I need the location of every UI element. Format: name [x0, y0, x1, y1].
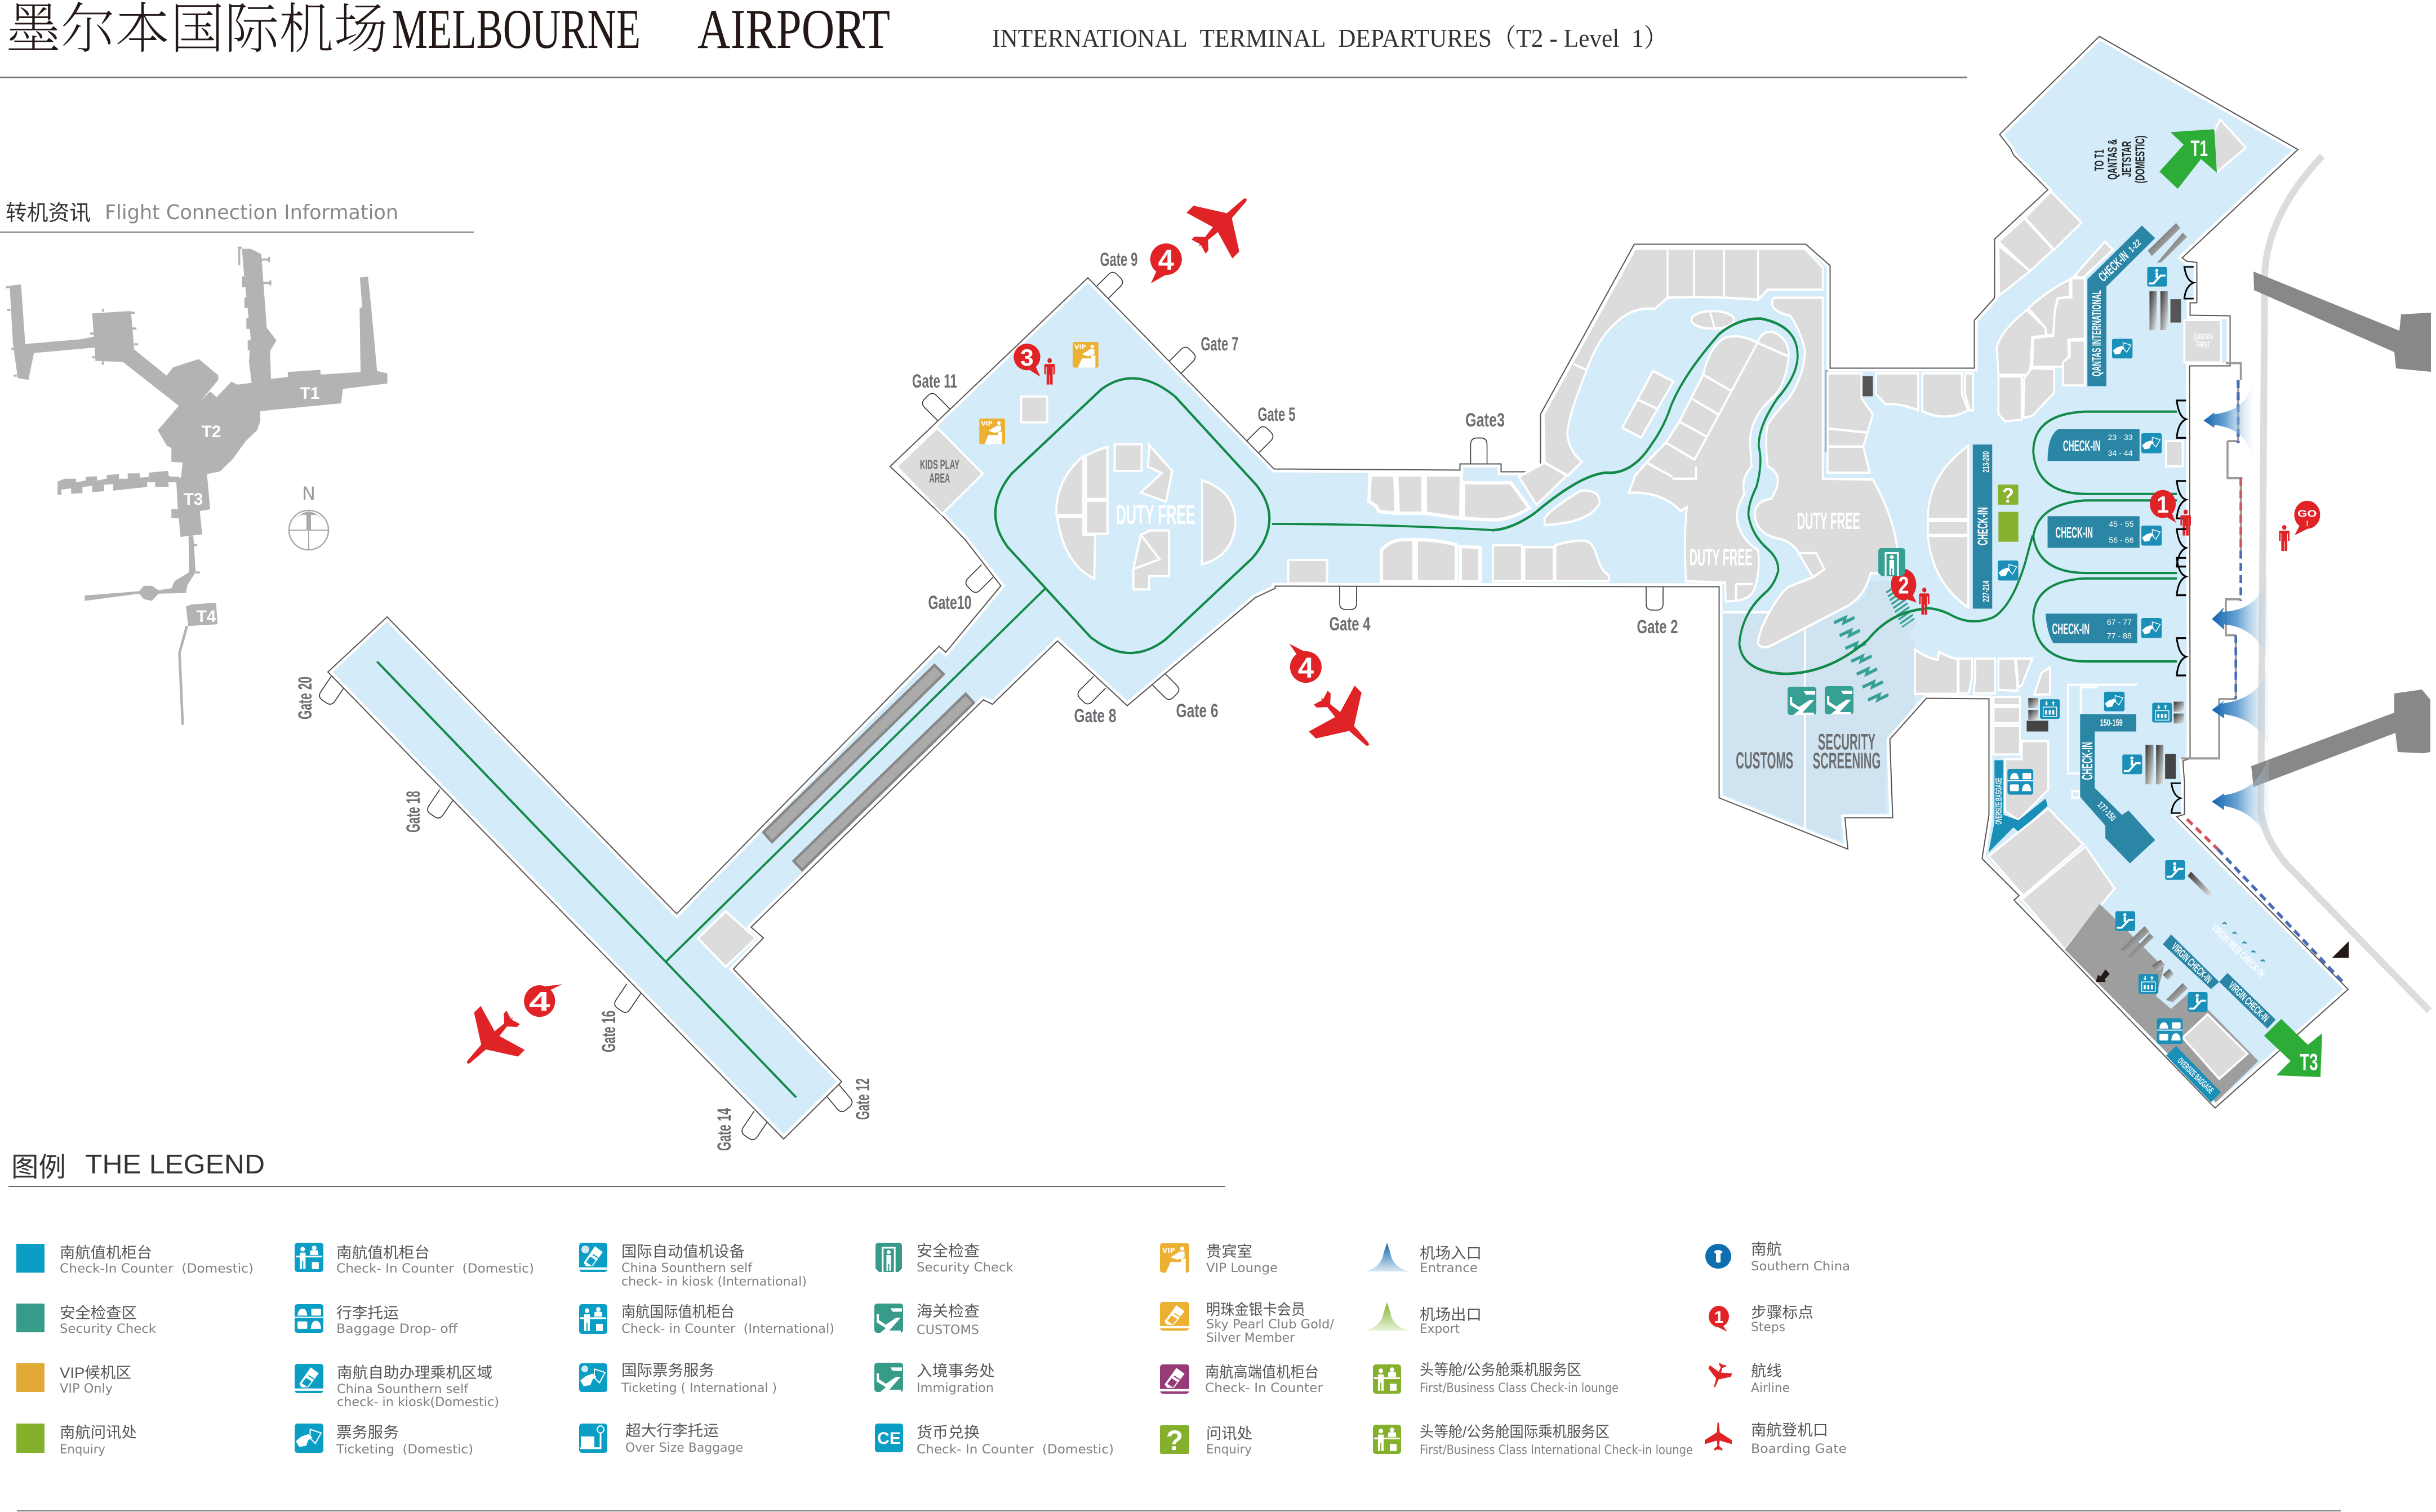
legend: airline: Airline [1751, 1381, 1790, 1395]
qantas first [2184, 320, 2221, 362]
legend: enquiry zone [16, 1424, 137, 1457]
legend: oversize baggage [579, 1422, 743, 1455]
legend: first business lounge [1373, 1362, 1619, 1395]
gate labels: Gate 5 [1257, 404, 1296, 425]
entrance arrow [2212, 574, 2269, 668]
check-in bar 200-227: 227-214 [1981, 581, 1991, 602]
legend: ticketing domestic [295, 1424, 473, 1457]
arrow to T1 [2159, 119, 2246, 189]
duty free retail left [1629, 332, 1789, 602]
step 4 marker: 4 [1298, 652, 1314, 684]
legend: entrance: 机场入口 [1420, 1245, 1482, 1262]
pier shapes and route [377, 661, 973, 1097]
legend: ticketing domestic: Ticketing (Domestic) [336, 1443, 473, 1457]
title: 墨尔本国际机场 [6, 0, 388, 60]
legend: first business international lounge [1373, 1424, 1693, 1457]
icon: ticketing [2112, 339, 2132, 358]
route: main path through retail [1493, 319, 1926, 674]
hub: satellite concourse [896, 243, 1327, 684]
virgin web check-in [2209, 921, 2267, 980]
entry doors [2171, 529, 2186, 813]
kids play area [896, 428, 983, 514]
transit zone [2065, 904, 2259, 1102]
person [2180, 510, 2191, 536]
check-in 67-88: 77 - 88 [2107, 632, 2132, 640]
north check-in hall [1997, 119, 2320, 601]
check-in 67-88: 67 - 77 [2107, 618, 2132, 626]
entry doors [2177, 267, 2194, 595]
check-in 23-44 [2048, 429, 2140, 461]
legend: first business lounge: First/Business Class Check-in lounge [1420, 1381, 1619, 1395]
legend: premium check-in [1160, 1364, 1323, 1395]
south check-in hall [1926, 529, 2349, 1102]
legend: security check zone: 安全检查区 [60, 1305, 137, 1322]
label: to T1: (DOMESTIC) [2133, 136, 2148, 183]
legend: self check-in domestic: China Sounthern self [337, 1382, 469, 1397]
south retail [1989, 808, 2083, 896]
qantas first: FIRST [2197, 340, 2211, 349]
escalators and lifts [2145, 702, 2212, 897]
route: pier connector [666, 589, 1045, 961]
legend: enquiry [1160, 1425, 1252, 1457]
icon: ticketing [2141, 526, 2162, 546]
icon: customs [1788, 687, 1816, 715]
legend: first business international lounge: First/Business Class International Check-in lounge [1420, 1443, 1693, 1457]
legend: oversize baggage: 超大行李托运 [625, 1422, 719, 1439]
legend: steps [1709, 1304, 1813, 1335]
kids play area: AREA [929, 470, 950, 485]
legend: check-in counter: Check- In Counter (Domestic) [336, 1262, 534, 1276]
kerb line north [2226, 363, 2242, 601]
oversize baggage bar [2166, 1046, 2221, 1102]
legend: check-in counter domestic: Check-In Counter (Domestic) [60, 1262, 254, 1276]
legend: vip lounge: VIP [1162, 1247, 1175, 1255]
icon: vip lounge [979, 419, 1005, 444]
virgin web check-in: VIRGIN WEB CHECK-IN [2209, 921, 2267, 980]
gate labels: Gate 20 [295, 677, 316, 719]
terminal labels: T3 [183, 490, 203, 509]
legend: immigration: 入境事务处 [917, 1363, 995, 1380]
stairs [1862, 376, 1873, 396]
entrance arrow [2212, 754, 2269, 847]
gate labels: Gate 11 [912, 371, 957, 392]
icon: ticketing [1998, 561, 2019, 581]
duty free retail right [1755, 298, 1898, 647]
kerb line south [2181, 599, 2344, 983]
legend: baggage drop-off: Baggage Drop- off [336, 1322, 458, 1336]
legend: currency exchange [875, 1424, 1114, 1457]
legend: vip lounge: VIP Lounge [1206, 1261, 1278, 1275]
icon: escalator [2115, 911, 2135, 931]
legend: steps: 步骤标点 [1751, 1304, 1813, 1321]
legend: enquiry: ? [1166, 1425, 1183, 1456]
icon: lift [2152, 702, 2172, 723]
legend: enquiry: Enquiry [1206, 1443, 1252, 1457]
legend: self check-in domestic [295, 1364, 499, 1409]
check-in 23-44: CHECK-IN [2063, 438, 2101, 454]
compass: N [302, 483, 315, 504]
legend: oversize baggage: Over Size Baggage [625, 1441, 743, 1455]
step 4 marker: pier [524, 984, 562, 1017]
legend: first business international lounge: 头等舱/公务舱国际乘机服务区 [1420, 1424, 1610, 1440]
icon: ticketing [2141, 618, 2162, 638]
legend: currency exchange: Check- In Counter (Domestic) [917, 1443, 1114, 1457]
heading: flight connection information: 转机资讯 [6, 202, 91, 225]
check-in 45-66 [2048, 516, 2140, 548]
step 4 marker [1150, 243, 1182, 283]
kids play area: KIDS PLAY [920, 457, 959, 472]
planes [446, 176, 1392, 1085]
legend: sky pearl club [1160, 1301, 1335, 1345]
check-in: qantas international: QANTAS INTERNATIONAL [2090, 290, 2104, 376]
legend: boarding gate: 南航登机口 [1751, 1422, 1828, 1439]
gate labels: Gate10 [928, 592, 971, 613]
step 3 marker [1013, 344, 1041, 377]
aerobridge upper [2253, 272, 2431, 372]
virgin check-in [2219, 973, 2275, 1029]
legend: enquiry zone: 南航问讯处 [60, 1424, 137, 1441]
route: loop around duty free [995, 379, 1269, 653]
legend: ticketing international: 国际票务服务 [621, 1362, 714, 1379]
check-in: qantas international: CHECK-IN [2096, 248, 2131, 284]
arrow to T3: T3 [2300, 1048, 2318, 1075]
check-in 150-177: 150-159 [2100, 718, 2123, 728]
legend: check-in international [579, 1304, 834, 1336]
corridor shops [1369, 475, 1530, 582]
legend heading: THE LEGEND [85, 1150, 265, 1180]
legend: vip only: VIP Only [60, 1382, 113, 1396]
legend: baggage drop-off [295, 1304, 458, 1336]
check-in bar 200-227: CHECK-IN [1975, 507, 1991, 545]
terminal labels: T1 [300, 384, 320, 403]
aerobridge lower [2251, 690, 2430, 787]
check-in: qantas international: 1-22 [2127, 238, 2143, 255]
oversize baggage bar: OVERSIZE BAGGAGE [1995, 778, 2004, 825]
legend: steps: Steps [1751, 1320, 1785, 1335]
step 3 marker: 3 [1020, 344, 1034, 371]
gate labels: Gate3 [1465, 410, 1505, 431]
person [2279, 525, 2290, 551]
go marker: GO [2297, 508, 2317, 519]
gate labels: Gate 7 [1201, 333, 1238, 355]
legend: self check-in domestic: check- in kiosk(Domestic) [337, 1395, 499, 1409]
subtitle: INTERNATIONAL TERMINAL DEPARTURES（T2 - Level 1） [992, 24, 1668, 52]
legend: boarding gate [1705, 1422, 1847, 1456]
locator map: airport terminals [6, 248, 388, 725]
icon: ticketing [2141, 433, 2162, 453]
legend: premium check-in: 南航高端值机柜台 [1205, 1364, 1319, 1381]
legend: southern china [1705, 1241, 1850, 1274]
icon: escalator [2188, 992, 2208, 1012]
escalators [2148, 223, 2187, 330]
route: hall approach [1926, 536, 2032, 621]
duty free labels: DUTY FREE [1690, 544, 1753, 570]
icon: vip lounge [1073, 342, 1099, 368]
go marker: ! [2306, 519, 2309, 528]
labels: customs and security [1736, 729, 1881, 773]
legend: ticketing domestic: 票务服务 [336, 1424, 399, 1441]
legend: sky pearl club: Sky Pearl Club Gold/ [1206, 1318, 1335, 1332]
legend: immigration: Immigration [917, 1381, 994, 1395]
icon: security check [1878, 548, 1905, 576]
labels: customs and security: SCREENING [1813, 748, 1881, 773]
entrance arrow [2212, 668, 2269, 750]
legend: security check [875, 1243, 1013, 1275]
legend: check-in counter [295, 1243, 534, 1276]
label: to T1 [2092, 136, 2148, 183]
check-in 150-177 [2079, 714, 2155, 864]
legend: ticketing international: Ticketing ( International ) [621, 1381, 777, 1395]
gate labels: Gate 12 [852, 1078, 874, 1120]
terminal labels: T4 [196, 607, 216, 626]
legend: security check zone: Security Check [60, 1322, 156, 1336]
legend heading [11, 1150, 265, 1182]
icon: ticketing [2104, 692, 2124, 711]
legend: self check-in domestic: 南航自助办理乘机区域 [337, 1364, 492, 1381]
label: to T1: QANTAS & [2106, 139, 2120, 180]
legend: customs [874, 1303, 980, 1337]
legend: enquiry zone: Enquiry [60, 1443, 105, 1457]
check-in 45-66: 56 - 66 [2109, 536, 2133, 545]
icon: escalator [2147, 267, 2167, 287]
legend: vip only [16, 1363, 131, 1396]
check-in: qantas international [2087, 225, 2155, 386]
step 1 marker [2150, 490, 2176, 523]
entrance arrow [2204, 382, 2252, 459]
icon: enquiry [1998, 484, 2019, 507]
icon: vip lounge: VIP [981, 420, 993, 427]
escalators [2121, 926, 2188, 1002]
person [1044, 358, 1055, 385]
legend: vip only: VIP候机区 [60, 1364, 131, 1381]
legend: export [1365, 1302, 1482, 1336]
label: to T1: JETSTAR [2120, 141, 2135, 177]
check-in 67-88 [2046, 613, 2137, 643]
legend: entrance: Entrance [1420, 1261, 1478, 1275]
gate labels: Gate 14 [714, 1108, 735, 1151]
terminal floor plate [331, 39, 2345, 1136]
terminal labels: T2 [201, 423, 221, 441]
legend: baggage drop-off: 行李托运 [336, 1305, 399, 1322]
go marker [2294, 501, 2320, 535]
gate labels: Gate 6 [1176, 700, 1218, 722]
gate labels: Gate 18 [403, 791, 424, 833]
road curb [2261, 156, 2429, 1011]
legend: export: Export [1420, 1322, 1460, 1336]
legend: steps: 1 [1714, 1308, 1723, 1327]
oversize baggage bar [1989, 761, 2048, 852]
gate labels: Gate 2 [1637, 616, 1678, 638]
security lanes [1834, 588, 1909, 700]
legend: check-in international: 南航国际值机柜台 [621, 1304, 735, 1320]
route: queue loop [2033, 579, 2176, 661]
oversize baggage bar: OVERSIZE BAGGAGE [2176, 1056, 2215, 1096]
legend: currency exchange: CE [877, 1429, 901, 1448]
virgin check-in [2163, 935, 2219, 989]
legend: customs: CUSTOMS [917, 1323, 979, 1337]
legend: security check zone [16, 1304, 156, 1336]
legend: self check-in international: 国际自动值机设备 [621, 1243, 745, 1260]
legend: export: 机场出口 [1420, 1306, 1482, 1323]
icon: vip lounge: VIP [1074, 344, 1086, 351]
arrow to T1: T1 [2191, 137, 2208, 162]
arrow: down [2096, 970, 2110, 982]
labels: customs and security: SECURITY [1818, 729, 1875, 754]
route: queue loops [2033, 412, 2176, 573]
legend: premium check-in: Check- In Counter [1205, 1381, 1323, 1395]
legend: airline: 航线 [1751, 1363, 1782, 1380]
compass [289, 483, 328, 550]
icon: baggage [2157, 1018, 2182, 1044]
legend: currency exchange: 货币兑换 [917, 1424, 980, 1441]
legend: enquiry: 问讯处 [1206, 1425, 1252, 1442]
virgin check-in: VIRGIN CHECK-IN [2226, 979, 2271, 1025]
step 1 marker: 1 [2157, 491, 2169, 518]
legend: southern china: 南航 [1751, 1241, 1782, 1258]
legend: security check: Security Check [917, 1261, 1013, 1275]
check-in 45-66: 45 - 55 [2109, 519, 2133, 528]
legend: customs: 海关检查 [917, 1303, 980, 1320]
legend: vip lounge: 贵宾室 [1206, 1243, 1252, 1260]
icon: enquiry: ? [2002, 484, 2014, 507]
icon: lift [2139, 974, 2158, 994]
legend: check-in counter: 南航值机柜台 [336, 1244, 430, 1261]
gate labels: Gate 8 [1074, 705, 1117, 727]
legend: ticketing international [579, 1362, 777, 1395]
check-in bar 200-227 [1973, 444, 1992, 608]
legend: immigration [874, 1363, 995, 1395]
enquiry desk [1998, 512, 2019, 542]
check-in 150-177: 177-150 [2096, 800, 2117, 824]
title [6, 0, 890, 60]
icon: immigration [1825, 686, 1853, 714]
legend: entrance [1365, 1243, 1482, 1275]
legend: sky pearl club: Silver Member [1206, 1331, 1295, 1345]
marker triangle [2332, 941, 2349, 958]
check-in 150-177: CHECK-IN [2079, 742, 2096, 780]
person [1919, 588, 1930, 615]
step 2 marker: 2 [1898, 572, 1909, 599]
legend: check-in counter domestic [16, 1244, 254, 1276]
central retail and security: DUTY FREE [1797, 508, 1860, 534]
step 4 marker: 4 [1158, 244, 1175, 276]
gate stubs [317, 270, 1663, 1142]
check-in 67-88: CHECK-IN [2052, 621, 2090, 638]
heading: flight connection information [6, 201, 398, 225]
check-in bar 200-227: 213-200 [1981, 451, 1991, 473]
security zone [1723, 581, 1917, 841]
legend heading: 图例 [11, 1153, 66, 1182]
icon: lift [2040, 699, 2060, 719]
terminal labels [183, 384, 320, 626]
legend: self check-in international [579, 1243, 807, 1289]
legend: airline [1703, 1360, 1790, 1395]
upper retail band [1544, 248, 1822, 475]
legend: first business lounge: 头等舱/公务舱乘机服务区 [1420, 1362, 1581, 1378]
legend: self check-in international: check- in kiosk (International) [621, 1275, 807, 1289]
legend: check-in counter domestic: 南航值机柜台 [60, 1244, 152, 1261]
check-in 45-66: CHECK-IN [2055, 525, 2093, 541]
legend: southern china: Southern China [1751, 1260, 1850, 1274]
labels: customs and security: CUSTOMS [1736, 747, 1793, 773]
legend: vip lounge [1160, 1243, 1278, 1275]
step 4 marker [1290, 644, 1322, 684]
legend [16, 1241, 1850, 1457]
gate labels [295, 249, 1678, 1151]
gate labels: Gate 4 [1330, 613, 1371, 635]
label: to T1: TO T1 [2092, 149, 2107, 171]
step 2 marker [1891, 569, 1917, 603]
route: corridor [1272, 524, 1493, 530]
gate labels: Gate 9 [1100, 249, 1138, 270]
gate labels: Gate 16 [598, 1011, 620, 1052]
icon: escalator [2122, 754, 2142, 774]
virgin check-in: VIRGIN CHECK-IN [2169, 940, 2214, 986]
icon: baggage [2007, 769, 2033, 795]
qantas first: QANTAS [2193, 332, 2213, 341]
legend: check-in international: Check- in Counter (International) [621, 1322, 834, 1336]
step 4 marker: pier: 4 [529, 987, 550, 1017]
legend: security check: 安全检查 [917, 1243, 980, 1260]
central retail and security [1493, 248, 1992, 841]
check-in 23-44: 34 - 44 [2108, 449, 2133, 457]
legend: self check-in international: China Sounthern self [621, 1261, 753, 1275]
label: duty free: DUTY FREE [1116, 500, 1195, 530]
icon: escalator [2165, 860, 2185, 880]
heading: flight connection information: Flight Connection Information [105, 201, 398, 224]
legend: sky pearl club: 明珠金银卡会员 [1206, 1301, 1305, 1318]
check-in 23-44: 23 - 33 [2108, 433, 2133, 442]
arrow to T3 [2264, 1019, 2322, 1077]
legend: boarding gate: Boarding Gate [1751, 1442, 1847, 1456]
